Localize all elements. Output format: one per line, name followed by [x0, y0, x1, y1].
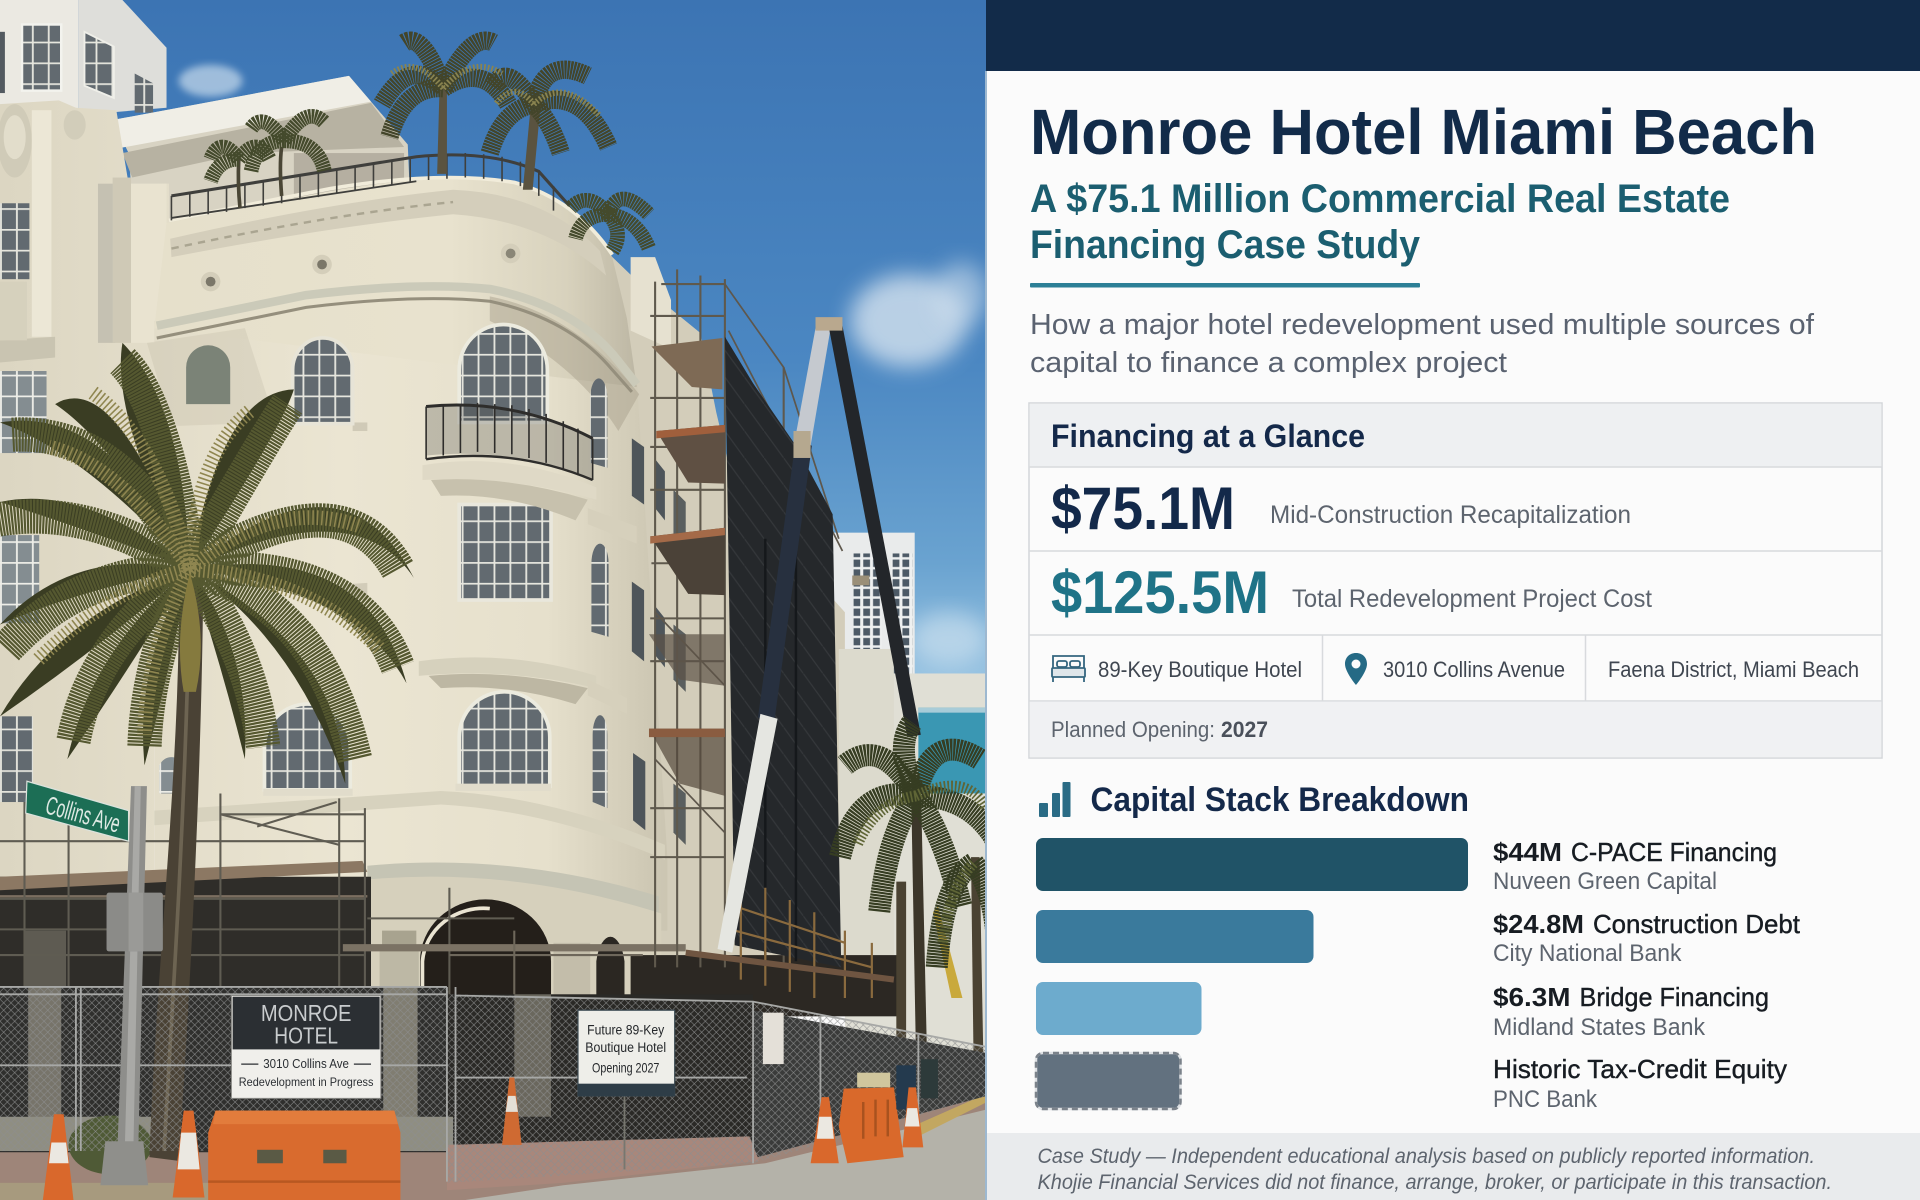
label: bridge financing: $6.3M [1493, 982, 1570, 1012]
right scaffolding with wood decks [649, 269, 842, 967]
fence interior background [0, 987, 987, 1190]
terrace railing [171, 153, 569, 220]
bar: bridge financing [1036, 982, 1202, 1035]
distant high-rise and glass tower [833, 533, 987, 1065]
label: bridge financing [1493, 982, 1769, 1041]
fact: address [1345, 653, 1565, 685]
main curved building body [147, 176, 639, 884]
upper tower [0, 0, 167, 122]
penthouse roof and terrace [113, 76, 410, 233]
icon: bar chart [1039, 782, 1070, 817]
glance heading: Financing at a Glance [1051, 418, 1365, 454]
glance heading [1030, 404, 1881, 467]
description: How a major hotel redevelopment used multiple sources of [1030, 309, 1815, 341]
fence signage: Monroe Hotel: MONROE [261, 1000, 351, 1026]
title: Monroe Hotel Miami Beach [1030, 96, 1817, 168]
fence signage: Monroe Hotel [231, 996, 381, 1098]
ornate left facade [0, 100, 169, 931]
label: bridge financing: Midland States Bank [1493, 1014, 1706, 1041]
street sign post and Collins Ave sign: Collins Ave [43, 792, 123, 839]
chain-link fence [0, 987, 987, 1183]
fact: district: Faena District, Miami Beach [1608, 657, 1859, 682]
fence signage: Monroe Hotel: 3010 Collins Ave [263, 1056, 349, 1071]
description [1030, 309, 1815, 379]
footer disclaimer [987, 1133, 1920, 1200]
street sign post and Collins Ave sign [26, 781, 163, 1185]
fence signage: future boutique hotel: Future 89-Key [587, 1022, 665, 1038]
panel: financing at a glance [1029, 403, 1882, 758]
rooftop palm trees [211, 41, 649, 251]
traffic cones [43, 1078, 923, 1200]
stat: 75.1M recapitalization: $75.1M [1051, 475, 1235, 542]
label: historic tax credit equity: Historic Tax-Credit Equity [1493, 1054, 1787, 1084]
planned opening: 2027 [1221, 717, 1268, 742]
panel: hotel redevelopment photo [0, 0, 1004, 1200]
fence signage: future boutique hotel: Boutique Hotel [585, 1039, 666, 1055]
label: construction debt: Construction Debt [1593, 909, 1801, 939]
fence signage: future boutique hotel [578, 1010, 784, 1169]
bar: C-PACE [1036, 838, 1468, 891]
ground: sidewalk, pavement and road [0, 1087, 987, 1200]
icon: bed [1052, 656, 1085, 682]
stat: 75.1M recapitalization: Mid-Construction Recapitalization [1270, 501, 1631, 529]
black construction netting [725, 337, 841, 967]
label: historic tax credit equity: PNC Bank [1493, 1086, 1598, 1113]
label: construction debt [1493, 909, 1801, 967]
fact: boutique hotel: 89-Key Boutique Hotel [1098, 657, 1302, 682]
balcony and floor bands [154, 403, 665, 913]
panel: financing information [985, 0, 1920, 1200]
fence signage: Monroe Hotel: HOTEL [274, 1022, 338, 1048]
stat: 125.5M project cost: Total Redevelopment Project Cost [1292, 585, 1652, 613]
footer disclaimer: Case Study — Independent educational analysis based on publicly reported information. [1038, 1144, 1815, 1168]
large palm crown [0, 343, 414, 784]
header bar [986, 0, 1920, 71]
label: C-PACE financing: $44M [1493, 837, 1562, 867]
label: C-PACE financing: Nuveen Green Capital [1493, 868, 1717, 895]
arched windows [159, 324, 686, 845]
description: capital to finance a complex project [1030, 347, 1507, 379]
label: historic tax credit equity [1493, 1054, 1787, 1113]
stat: 125.5M project cost [1051, 559, 1652, 626]
subtitle: A $75.1 Million Commercial Real Estate [1030, 177, 1730, 221]
ground floor [0, 861, 900, 1022]
right palm trees [840, 722, 1004, 1053]
footer disclaimer: Khojie Financial Services did not finance, arrange, broker, or participate in this transaction. [1038, 1170, 1832, 1194]
label: C-PACE financing: C-PACE Financing [1571, 837, 1777, 867]
bar: historic tax credit [1036, 1053, 1180, 1109]
lower right scaffolding [686, 884, 894, 998]
side wing facade [606, 251, 894, 992]
fence signage: future boutique hotel: Opening 2027 [592, 1061, 659, 1076]
fence signage: Monroe Hotel: Redevelopment in Progress [239, 1075, 373, 1089]
label: construction debt: City National Bank [1493, 940, 1682, 967]
stat: 125.5M project cost: $125.5M [1051, 559, 1269, 626]
bar chart: capital stack [1036, 838, 1468, 1109]
planned opening: Planned Opening: [1051, 717, 1215, 742]
stat: 75.1M recapitalization [1051, 475, 1631, 542]
orange barriers [208, 1059, 938, 1200]
street trunk of large palm [149, 576, 203, 1161]
subtitle [1030, 177, 1730, 267]
label: construction debt: $24.8M [1493, 909, 1584, 939]
capital stack heading: Capital Stack Breakdown [1090, 781, 1469, 819]
bar: construction debt [1036, 910, 1314, 963]
label: bridge financing: Bridge Financing [1580, 982, 1769, 1012]
crane booms [718, 317, 921, 953]
label: C-PACE financing [1493, 837, 1777, 895]
left scaffolding [0, 793, 686, 998]
fact: address: 3010 Collins Avenue [1383, 657, 1565, 682]
subtitle: Financing Case Study [1030, 223, 1421, 267]
icon: map pin [1345, 653, 1367, 685]
sky with clouds [0, 0, 988, 735]
planned opening [1030, 702, 1881, 757]
